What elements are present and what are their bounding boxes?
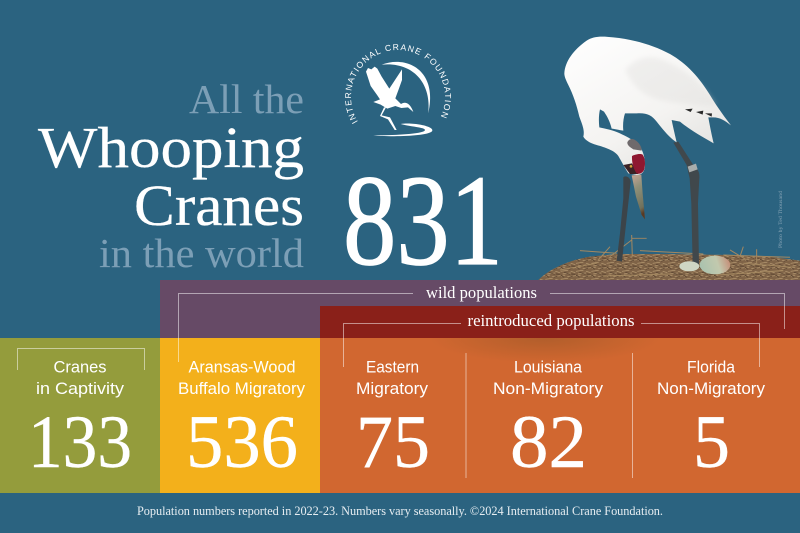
crane photo — [538, 37, 800, 280]
label: Aransas-Wood — [188, 358, 296, 376]
label: Florida Non-Migratory: Non-Migratory — [657, 379, 766, 398]
panel: cranes in captivity — [0, 338, 160, 493]
title: in the world — [99, 230, 304, 276]
heading: wild populations: wild populations — [426, 283, 537, 302]
label: Louisiana Non-Migratory: Non-Migratory — [493, 379, 604, 398]
near leg — [673, 142, 699, 265]
panel: Aransas-Wood Buffalo Migratory — [160, 338, 320, 493]
label: Louisiana Non-Migratory: Louisiana — [514, 358, 583, 376]
face and eye — [623, 163, 638, 174]
bill — [632, 175, 645, 219]
leg band — [688, 164, 698, 172]
logo crane — [366, 62, 432, 136]
label: Louisiana Non-Migratory — [493, 358, 604, 398]
title — [38, 76, 304, 276]
eggs — [700, 256, 730, 274]
count: Louisiana: 82 — [510, 401, 587, 484]
label: Eastern Migratory — [356, 358, 429, 398]
count: 536 — [186, 401, 298, 484]
panel: reintroduced populations — [320, 338, 800, 493]
nest — [538, 235, 800, 280]
bracket: reintroduced populations — [344, 311, 760, 367]
tail feather marks — [685, 109, 712, 117]
label: in Captivity — [36, 379, 125, 398]
body and neck — [564, 37, 731, 175]
crown patch — [627, 139, 642, 151]
label: Florida Non-Migratory: Florida — [687, 358, 736, 376]
heading: reintroduced populations: reintroduced populations — [468, 311, 634, 330]
title: All the — [189, 76, 304, 122]
wing shading — [625, 57, 717, 106]
count: Eastern: 75 — [356, 401, 430, 484]
photo credit: Photo by Ted Thousand — [778, 191, 784, 248]
count: 133 — [28, 401, 132, 484]
label: Buffalo Migratory — [178, 379, 306, 398]
label: Eastern Migratory: Eastern — [366, 358, 419, 376]
label: Cranes — [54, 358, 106, 376]
label — [36, 358, 125, 398]
logo: International Crane Foundation — [345, 44, 451, 136]
bracket — [18, 348, 144, 370]
count: Florida: 5 — [693, 401, 730, 484]
band: reintroduced populations — [320, 306, 800, 338]
band: wild populations — [160, 280, 800, 338]
nest shadow — [430, 338, 660, 388]
total count: 831 — [343, 149, 503, 293]
footer note: Population numbers reported in 2022-23. Numbers vary seasonally. ©2024 International Crane Foundation. — [137, 504, 663, 518]
label — [178, 358, 306, 398]
title: Cranes — [134, 173, 304, 238]
logo ring text: INTERNATIONAL CRANE FOUNDATION — [345, 44, 451, 124]
label: Eastern Migratory: Migratory — [356, 379, 429, 398]
label: Florida Non-Migratory — [657, 358, 766, 398]
bracket: wild populations — [178, 283, 784, 362]
red face — [632, 154, 645, 174]
far leg — [617, 176, 631, 262]
title: Whooping — [38, 115, 304, 180]
